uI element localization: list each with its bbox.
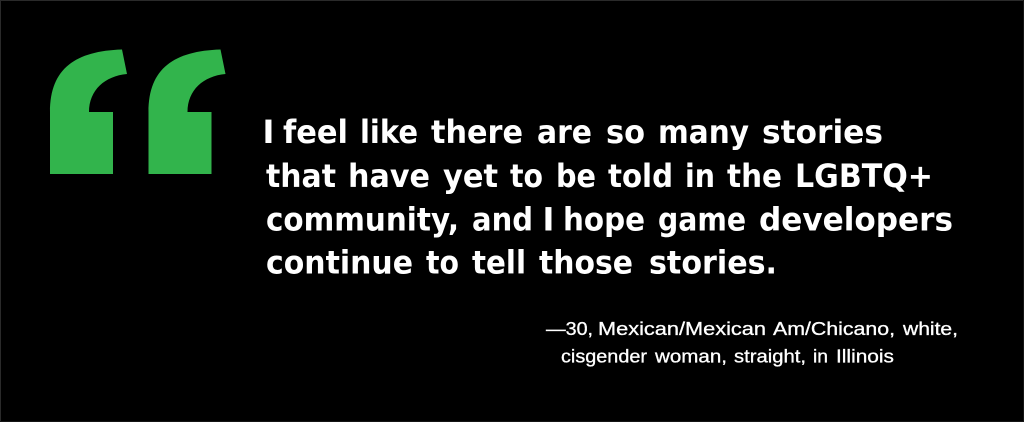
quote text: LGBTQ+	[795, 157, 933, 195]
attribution: —30,	[546, 319, 593, 339]
quote text: developers	[759, 200, 953, 238]
quote text: continue	[266, 244, 413, 282]
attribution: in	[813, 346, 828, 366]
quote text: game	[658, 200, 746, 238]
attribution: cisgender	[561, 346, 647, 366]
quote text: there	[431, 113, 523, 151]
icon: green quotation marks	[50, 50, 226, 174]
attribution: straight,	[734, 346, 806, 366]
quote text: to	[426, 244, 459, 282]
quote text: and	[472, 200, 533, 238]
quote text: are	[537, 113, 592, 151]
quote text: yet	[443, 157, 498, 195]
attribution: Illinois	[836, 346, 894, 366]
quote text: like	[360, 113, 418, 151]
attribution: white,	[902, 319, 958, 339]
quote text	[262, 113, 953, 282]
quote text: stories	[762, 113, 883, 151]
quote text: so	[606, 113, 645, 151]
quote text: community,	[266, 200, 459, 238]
attribution	[546, 319, 958, 366]
quote text: stories.	[649, 244, 777, 282]
quote text: hope	[563, 200, 645, 238]
attribution: woman,	[654, 346, 727, 366]
quote text: the	[727, 157, 782, 195]
quote text: I	[262, 113, 274, 151]
quote text: I	[542, 200, 554, 238]
quote text: those	[539, 244, 633, 282]
quote text: in	[685, 157, 715, 195]
quote text: be	[556, 157, 596, 195]
quote text: to	[510, 157, 543, 195]
quote text: told	[608, 157, 673, 195]
quote text: feel	[283, 113, 348, 151]
attribution: Am/Chicano,	[773, 319, 895, 339]
quote text: that	[266, 157, 336, 195]
quote text: many	[658, 113, 749, 151]
attribution: Mexican/Mexican	[598, 319, 766, 339]
quote text: tell	[472, 244, 526, 282]
quote text: have	[348, 157, 430, 195]
